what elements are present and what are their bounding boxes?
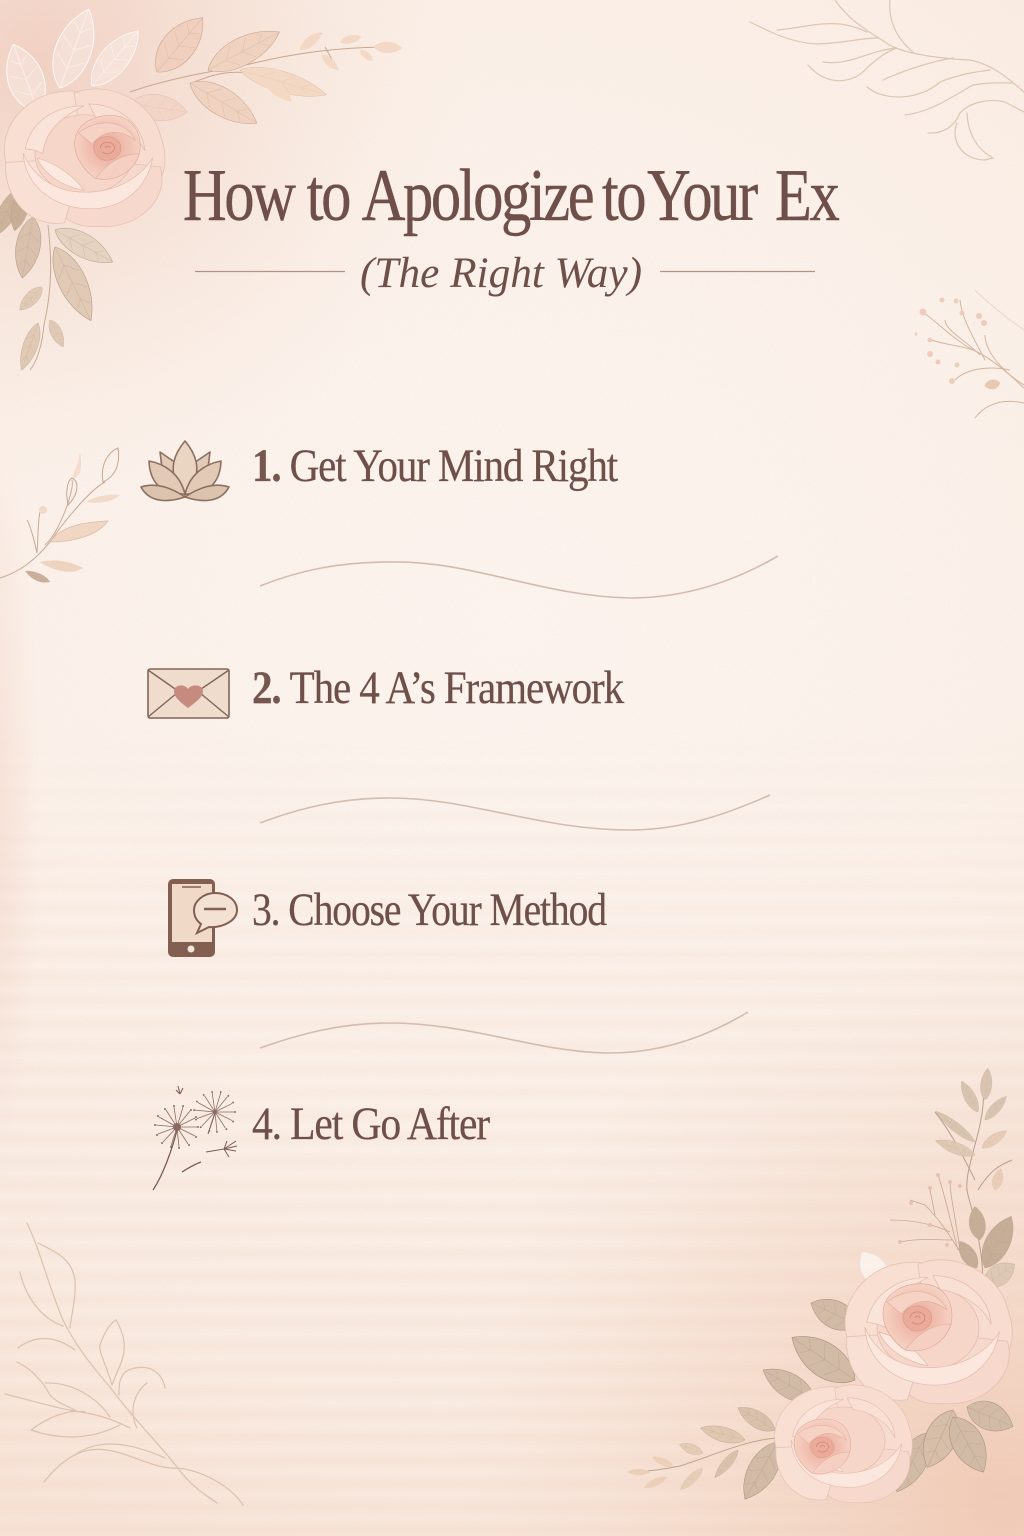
white sketched leaves xyxy=(0,3,149,118)
line art: right sprig with berries xyxy=(914,290,1024,418)
floral corner: top left rose xyxy=(0,3,402,373)
divider 2 xyxy=(260,795,770,830)
title: to xyxy=(602,154,657,236)
step 2 xyxy=(148,662,625,718)
step 1 xyxy=(141,440,618,501)
icon: phone with speech bubble xyxy=(168,879,237,957)
title: How xyxy=(183,154,306,236)
subtitle with rules: (The Right Way) xyxy=(360,250,642,297)
title: Apologize xyxy=(362,154,605,236)
large rose xyxy=(845,1260,1012,1404)
upper sprig stems xyxy=(935,1072,1012,1285)
sprig leaves xyxy=(128,7,329,135)
left sprig stem xyxy=(628,1438,775,1472)
step 3 xyxy=(168,879,607,957)
divider 1 xyxy=(260,556,778,598)
icon: dandelion xyxy=(153,1086,237,1190)
floral corner: bottom right roses xyxy=(627,1068,1022,1506)
icon: lotus xyxy=(141,441,229,501)
step 1 label: 1. Get Your Mind Right xyxy=(252,440,618,492)
sprig stem xyxy=(130,33,400,92)
title: Your xyxy=(647,154,768,236)
step 4 xyxy=(153,1086,490,1190)
line art: bottom left botanical xyxy=(5,1223,243,1505)
lower stem xyxy=(30,225,51,370)
step 2 label: 2. The 4 A’s Framework xyxy=(252,662,625,714)
step 4 label: 4. Let Go After xyxy=(252,1098,490,1150)
small rose xyxy=(775,1385,912,1503)
icon: envelope with heart xyxy=(148,669,229,718)
line art: left sprig xyxy=(0,448,120,583)
title: to xyxy=(307,154,362,236)
rose leaves xyxy=(627,1291,1019,1506)
berries xyxy=(890,1173,972,1270)
lower leaves xyxy=(0,184,118,373)
rose xyxy=(4,89,165,227)
upper sprig leaves xyxy=(933,1068,1022,1293)
title: Ex xyxy=(775,154,839,236)
step 3 label: 3. Choose Your Method xyxy=(252,884,607,936)
sprig buds xyxy=(297,29,402,73)
line art: top right botanical xyxy=(750,0,1024,160)
divider 3 xyxy=(260,1012,748,1053)
white leaf xyxy=(852,1245,895,1292)
